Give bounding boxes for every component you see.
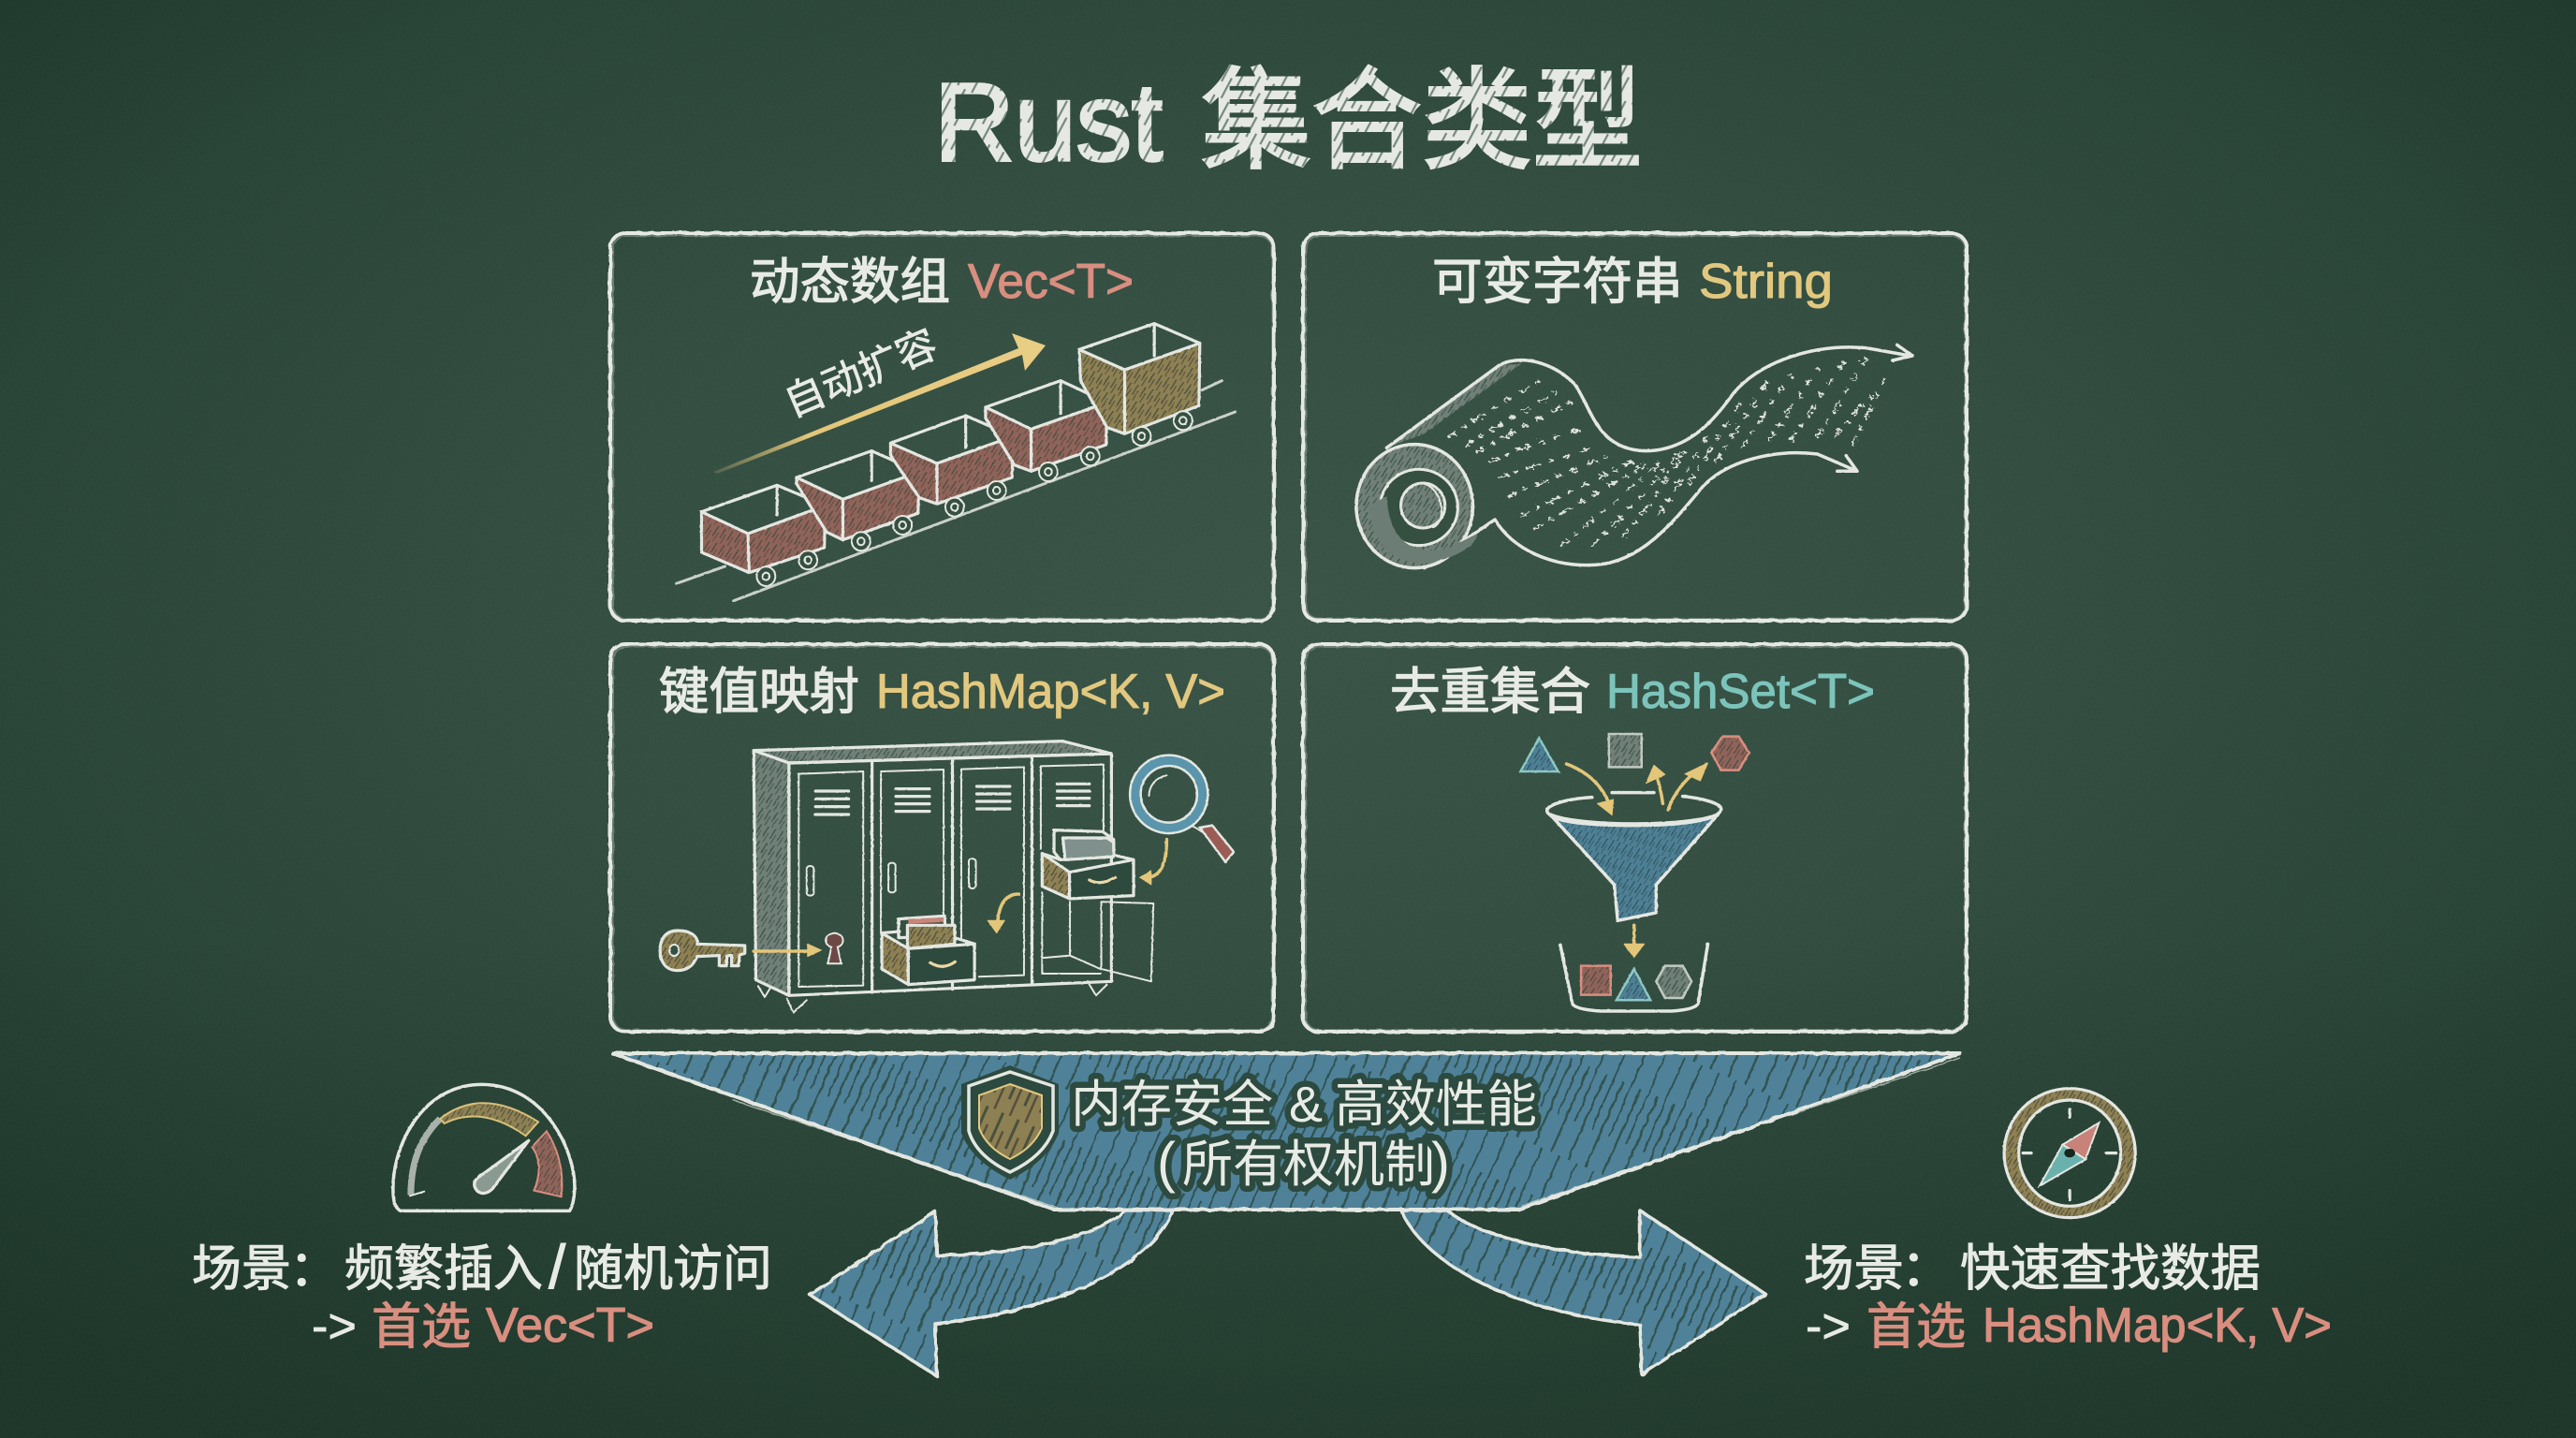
type name: Vec: Vec<T> bbox=[968, 255, 1134, 309]
arrow glyph: -> bbox=[312, 1299, 357, 1354]
scenario line 1: 频繁插入 bbox=[344, 1241, 543, 1297]
panel frame bbox=[610, 644, 1274, 1032]
upper arrow bbox=[1147, 840, 1166, 877]
panel: HashSet bbox=[1303, 644, 1967, 1032]
panel frame bbox=[610, 233, 1274, 621]
icon: speedometer bbox=[393, 1084, 575, 1211]
funnel bbox=[1547, 793, 1721, 920]
scenario line 1: 随机访问 bbox=[574, 1241, 772, 1297]
lower drawer bbox=[882, 916, 974, 985]
arrow: auto grow bbox=[713, 333, 1046, 474]
title: Rust bbox=[934, 61, 1163, 184]
cart 4 bbox=[986, 381, 1107, 471]
banner shape bbox=[612, 1053, 1960, 1210]
illustration: scroll ribbon bbox=[1356, 345, 1912, 568]
banner text line 2: ( bbox=[1157, 1131, 1176, 1194]
illustration: dedupe funnel bbox=[1520, 734, 1749, 1011]
right arrow bbox=[1401, 1211, 1765, 1374]
banner text line 1: 内存安全 bbox=[1071, 1077, 1273, 1133]
label: auto grow: 自动扩容 bbox=[778, 322, 944, 426]
type name: String: String bbox=[1699, 255, 1833, 309]
title: 集合类型 bbox=[1201, 60, 1643, 183]
key arrow bbox=[754, 949, 811, 953]
banner text line 1: 高效性能 bbox=[1335, 1077, 1537, 1133]
scenario line 1: 快速查找数据 bbox=[1960, 1241, 2261, 1297]
cabinet bbox=[754, 741, 1111, 995]
panel frame bbox=[1303, 233, 1967, 621]
scenario line 1: 场景 bbox=[192, 1241, 291, 1297]
banner text line 2: 所有权机制 bbox=[1182, 1137, 1435, 1193]
wheels bbox=[756, 411, 1193, 586]
input shapes bbox=[1520, 734, 1749, 771]
type name: HashSet: HashSet<T> bbox=[1606, 665, 1875, 719]
panel: HashMap bbox=[610, 644, 1274, 1032]
scenario line 1: 场景 bbox=[1804, 1241, 1904, 1297]
bucket bbox=[1560, 944, 1708, 1011]
banner: memory safety bbox=[612, 1053, 1960, 1210]
arrows into and out of funnel bbox=[1567, 763, 1708, 958]
icon: compass bbox=[2004, 1089, 2135, 1218]
doors bbox=[798, 765, 1104, 987]
heading: 键值映射 bbox=[659, 665, 859, 720]
heading: 可变字符串 bbox=[1432, 255, 1683, 310]
illustration: growing carts on a rail bbox=[677, 324, 1236, 601]
handles bbox=[807, 858, 976, 896]
vents bbox=[815, 784, 1090, 814]
panel: String bbox=[1303, 233, 1967, 621]
recommendation: 首选 bbox=[372, 1299, 471, 1355]
scenario line 1: ： bbox=[289, 1229, 339, 1300]
arrow glyph: -> bbox=[1806, 1299, 1851, 1354]
banner text line 2: ) bbox=[1431, 1131, 1450, 1194]
lower arrow bbox=[998, 894, 1018, 925]
left arrow bbox=[810, 1211, 1173, 1376]
banner text line 1: & bbox=[1289, 1077, 1323, 1133]
scenario line 1: ： bbox=[1901, 1228, 1951, 1300]
type name: HashMap: HashMap<K, V> bbox=[876, 665, 1225, 719]
icon: shield bbox=[961, 1065, 1059, 1180]
panel: Vec dynamic array bbox=[610, 233, 1274, 621]
feet bbox=[758, 985, 1107, 1013]
illustration: lockers, key and magnifier bbox=[660, 741, 1234, 1013]
key bbox=[660, 931, 745, 971]
cart 1 bbox=[701, 485, 826, 573]
recommended type: HashMap<K, V> bbox=[1983, 1299, 2332, 1353]
scenario line 1: / bbox=[549, 1232, 566, 1301]
scenario: right bbox=[1804, 1228, 2332, 1355]
cart 5 gold bbox=[1079, 324, 1200, 433]
keyhole bbox=[826, 933, 843, 963]
title bbox=[934, 60, 1643, 184]
heading: 去重集合 bbox=[1390, 665, 1590, 720]
recommended type: Vec<T> bbox=[486, 1299, 654, 1353]
panel frame bbox=[1303, 644, 1967, 1032]
upper drawer bbox=[1042, 830, 1134, 899]
magnifier bbox=[1135, 760, 1234, 862]
handwritten lines bbox=[1449, 359, 1888, 546]
recommendation: 首选 bbox=[1866, 1299, 1966, 1355]
cart 2 bbox=[797, 451, 919, 540]
cart 3 bbox=[890, 416, 1014, 504]
result shapes bbox=[1581, 966, 1691, 1000]
scenario: left bbox=[192, 1229, 772, 1355]
heading: 动态数组 bbox=[750, 255, 950, 310]
open door bbox=[1042, 892, 1153, 981]
